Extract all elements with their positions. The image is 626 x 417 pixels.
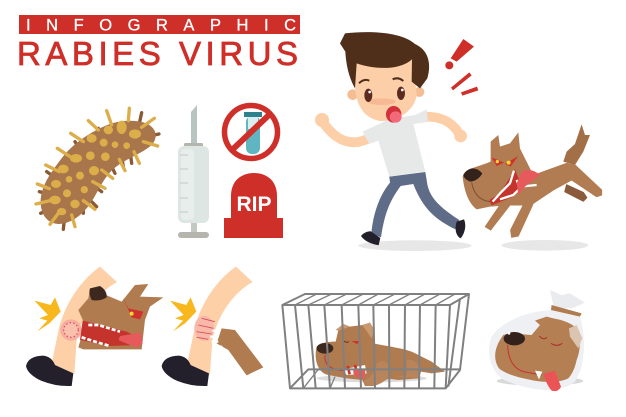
man legs — [361, 172, 465, 245]
title: rabies virus: RABIES VIRUS — [17, 35, 298, 72]
scene: dog in plastic bag — [489, 290, 585, 391]
icon: rip tombstone — [224, 173, 283, 238]
bite wound — [60, 319, 82, 341]
illustration: man running from dog — [315, 32, 602, 251]
icon: rip tombstone: RIP — [236, 193, 272, 216]
sleeping dog — [316, 323, 445, 386]
pain burst — [170, 297, 196, 331]
bag shadow — [497, 376, 583, 386]
scene: caged dog — [282, 294, 469, 388]
scratch marks — [194, 316, 215, 341]
shoe — [26, 356, 73, 386]
leg — [52, 267, 117, 374]
title banner: infographic: INFOGRAPHIC — [26, 16, 296, 34]
icon: rabies virus — [36, 108, 159, 229]
dog paw — [211, 328, 263, 375]
leg — [187, 267, 253, 374]
dog head — [78, 284, 163, 349]
scene: scratched leg — [162, 267, 263, 386]
man shirt — [363, 109, 428, 177]
plastic bag — [489, 290, 585, 390]
cage — [282, 294, 469, 388]
man head — [340, 32, 429, 123]
shadow — [317, 374, 427, 382]
angry dog — [463, 124, 602, 237]
ground shadows — [358, 240, 588, 251]
scene: dog biting leg — [26, 267, 163, 386]
icon: no test tube sign — [224, 106, 278, 158]
shoe — [162, 356, 209, 386]
icon: syringe — [178, 105, 209, 238]
man arms — [323, 117, 460, 142]
exclamation mark — [445, 39, 478, 96]
dog head in bag — [495, 317, 582, 391]
pain burst — [34, 297, 61, 331]
